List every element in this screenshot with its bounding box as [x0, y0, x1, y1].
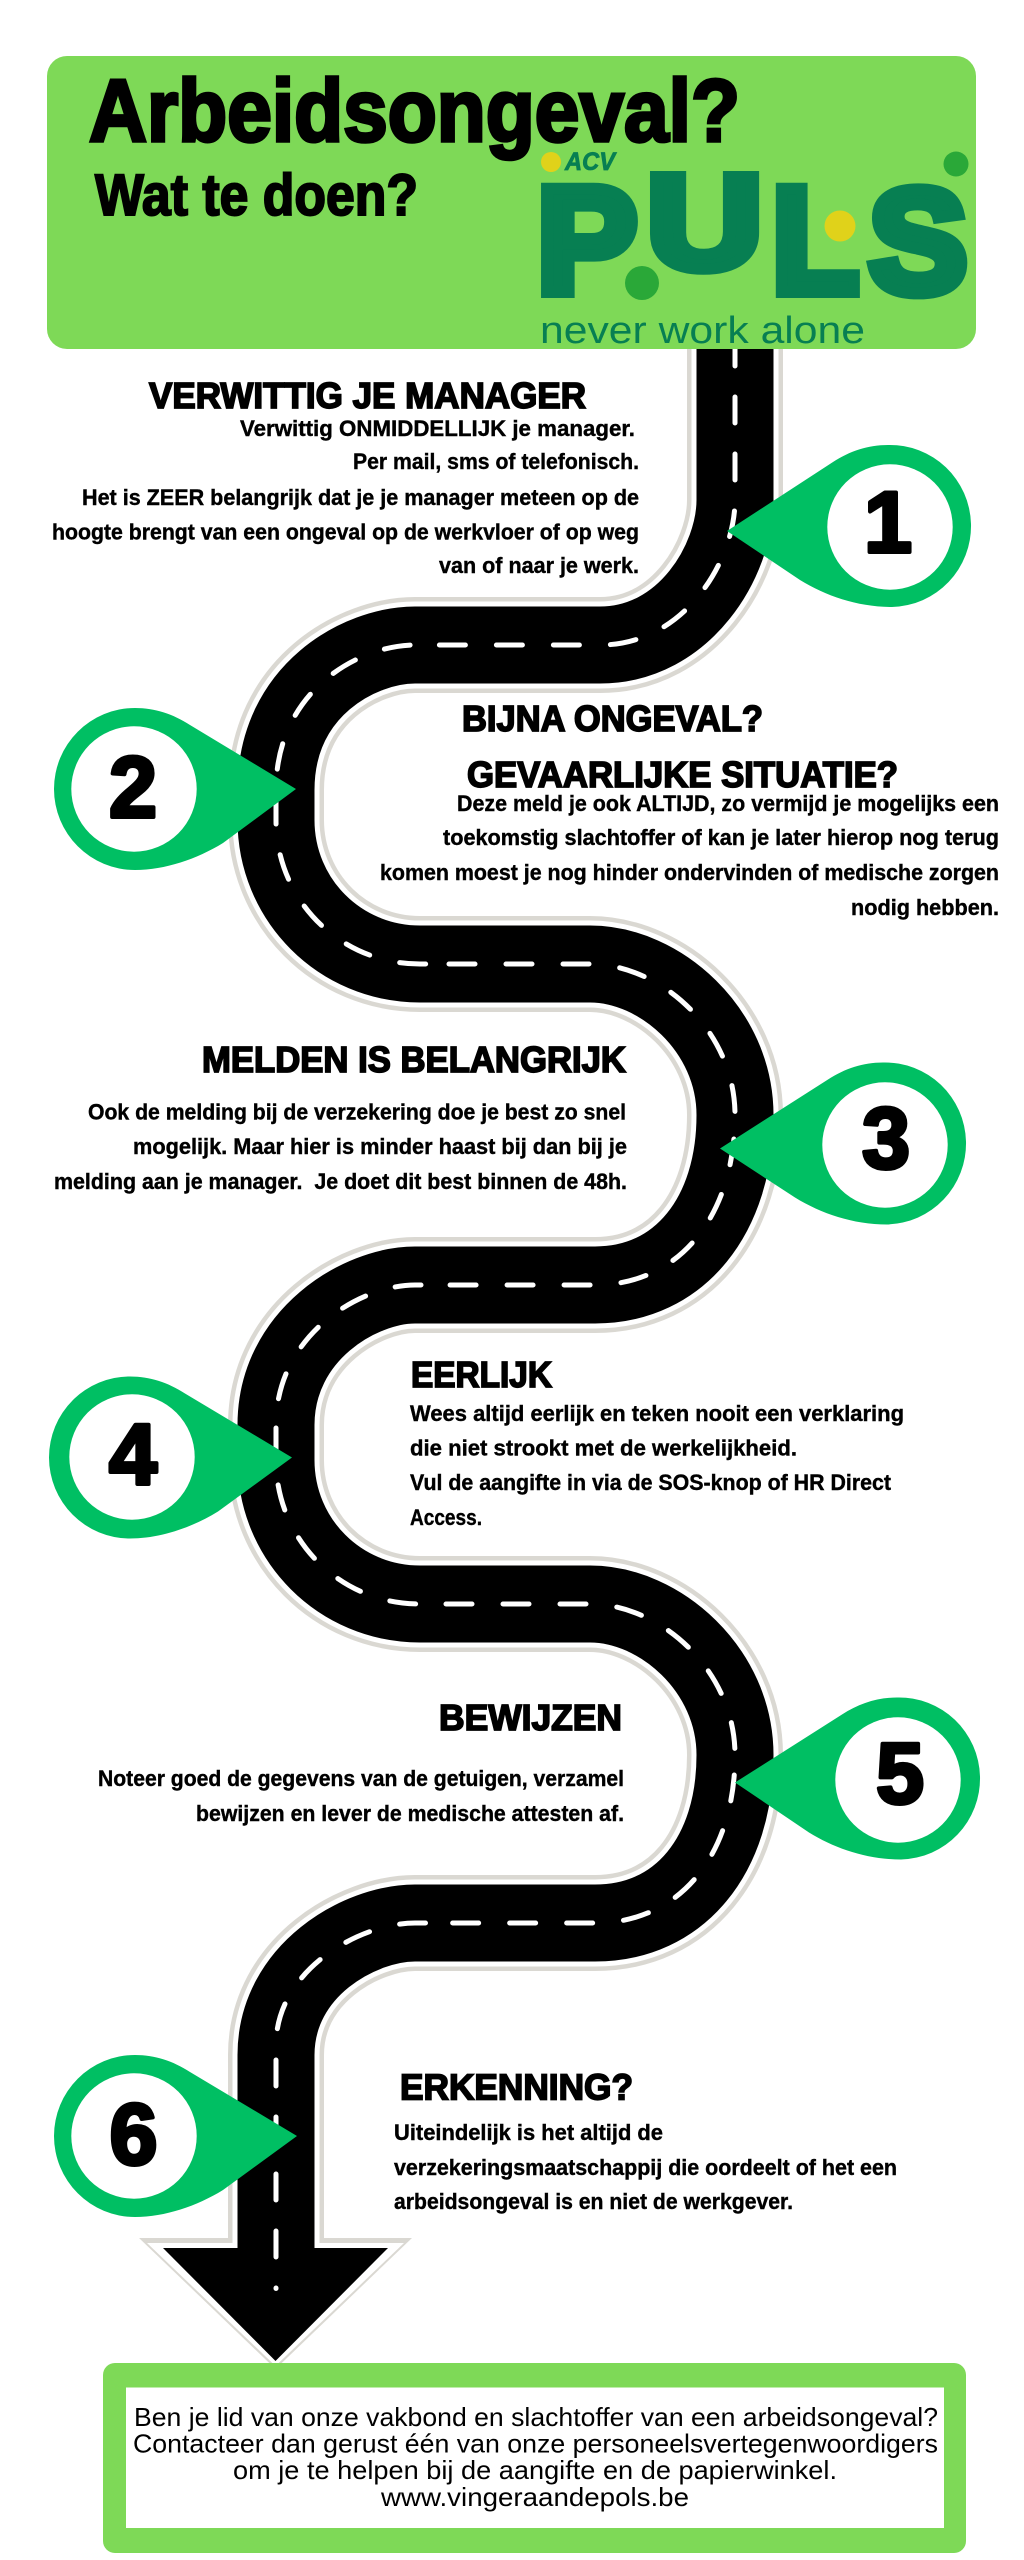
step 1 text — [52, 375, 639, 578]
footer text: Contacteer dan gerust één van onze personeelsvertegenwoordigers — [133, 2428, 938, 2458]
footer text: om je te helpen bij de aangifte en de papierwinkel. — [233, 2455, 837, 2485]
body 2: nodig hebben. — [851, 895, 999, 920]
body 3: mogelijk. Maar hier is minder haast bij dan bij je — [133, 1134, 627, 1159]
pin 4 — [49, 1376, 292, 1538]
body 3: Ook de melding bij de verzekering doe je best zo snel — [88, 1100, 626, 1124]
logo: ACV Puls: U — [647, 148, 762, 297]
step 2 text — [380, 698, 999, 920]
body 6: Uiteindelijk is het altijd de — [394, 2120, 663, 2145]
body 1: Per mail, sms of telefonisch. — [353, 449, 639, 474]
body 4: Wees altijd eerlijk en teken nooit een verklaring — [410, 1401, 904, 1426]
logo: ACV Puls: ACV — [564, 148, 617, 176]
footer text — [133, 2402, 938, 2512]
step 3 text — [54, 1039, 627, 1194]
heading 6: ERKENNING? — [400, 2066, 633, 2108]
step 4 text — [410, 1354, 904, 1530]
body 1: Het is ZEER belangrijk dat je je manager meteen op de — [82, 485, 639, 510]
pin 6: 6 — [110, 2087, 157, 2183]
footer text: www.vingeraandepols.be — [380, 2482, 689, 2512]
body 2 — [380, 791, 999, 920]
pin 2: 2 — [109, 740, 157, 836]
body 5 — [98, 1766, 624, 1826]
footer text: Ben je lid van onze vakbond en slachtoffer van een arbeidsongeval? — [134, 2402, 938, 2432]
body 1: Verwittig ONMIDDELLIJK je manager. — [240, 416, 635, 441]
winding road with arrow — [139, 337, 735, 2369]
body 6: verzekeringsmaatschappij die oordeelt of het een — [394, 2155, 897, 2180]
body 6 — [394, 2120, 897, 2214]
body 4 — [410, 1401, 904, 1530]
heading 2: GEVAARLIJKE SITUATIE? — [467, 754, 898, 795]
heading 3: MELDEN IS BELANGRIJK — [202, 1039, 626, 1080]
body 4: die niet strookt met de werkelijkheid. — [410, 1436, 797, 1460]
pin 4: 4 — [109, 1407, 157, 1503]
pin 5 — [735, 1697, 980, 1860]
logo: ACV Puls — [537, 148, 968, 352]
heading 4: EERLIJK — [411, 1354, 552, 1395]
body 2: Deze meld je ook ALTIJD, zo vermijd je mogelijks een — [457, 791, 999, 816]
body 1: hoogte brengt van een ongeval op de werkvloer of op weg — [52, 520, 639, 544]
step 5 text — [98, 1697, 624, 1826]
heading 5: BEWIJZEN — [439, 1697, 622, 1738]
body 4: Vul de aangifte in via de SOS-knop of HR Direct — [410, 1470, 892, 1495]
subtitle: Wat te doen? — [95, 163, 418, 228]
heading 1: VERWITTIG JE MANAGER — [149, 375, 586, 416]
pin 3: 3 — [862, 1091, 910, 1187]
logo: ACV Puls: never work alone — [540, 310, 865, 352]
logo: ACV Puls: S — [869, 160, 967, 324]
body 4: Access. — [410, 1505, 482, 1530]
step 6 text — [394, 2066, 897, 2214]
pin 2 — [54, 708, 296, 870]
pin 6 — [54, 2055, 297, 2217]
body 3 — [54, 1100, 627, 1194]
body 5: bewijzen en lever de medische attesten af. — [196, 1801, 624, 1826]
header panel — [47, 56, 976, 352]
pin 5: 5 — [876, 1726, 924, 1822]
pin 1: 1 — [864, 475, 912, 571]
footer panel — [103, 2363, 966, 2553]
body 1 — [52, 416, 639, 578]
body 1: van of naar je werk. — [439, 553, 639, 578]
body 2: komen moest je nog hinder ondervinden of medische zorgen — [380, 860, 999, 885]
logo: ACV Puls: P — [537, 156, 637, 324]
body 6: arbeidsongeval is en niet de werkgever. — [394, 2189, 793, 2214]
pin 1 — [727, 445, 971, 607]
body 2: toekomstig slachtoffer of kan je later hierop nog terug — [443, 825, 999, 850]
pin 3 — [720, 1062, 966, 1224]
heading 2: BIJNA ONGEVAL? — [462, 698, 763, 739]
heading 2 — [462, 698, 898, 795]
body 5: Noteer goed de gegevens van de getuigen, verzamel — [98, 1766, 624, 1791]
title: Arbeidsongeval? — [89, 61, 740, 160]
body 3: melding aan je manager. Je doet dit best binnen de 48h. — [54, 1169, 627, 1194]
logo: ACV Puls: L — [772, 156, 859, 324]
